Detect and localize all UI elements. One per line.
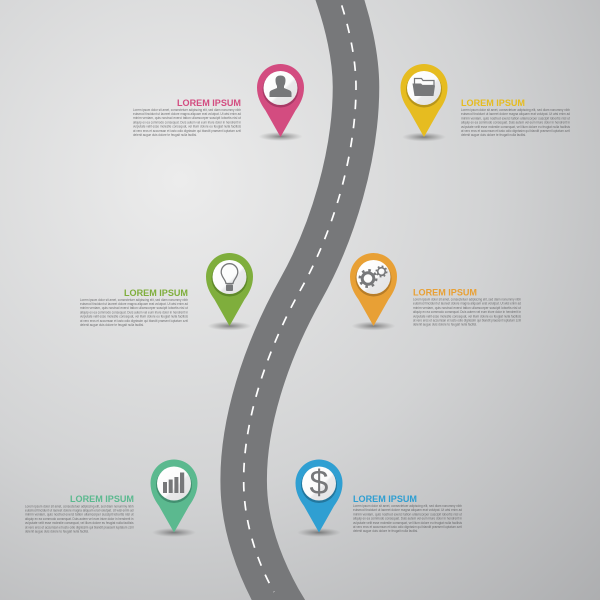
heading and text: blue: delenit augue duis dolore te feugait nulla facilisi.	[353, 528, 418, 533]
heading and text: pink: minim veniam, quis nostrud exerci tation ullamcorper suscipit lobortis nisl ut	[133, 115, 242, 120]
heading and text: blue	[353, 494, 463, 533]
heading and text: pink: delenit augue duis dolore te feugait nulla facilisi.	[133, 132, 197, 137]
icon: dollar sign: $	[310, 464, 329, 502]
heading and text: orange: delenit augue duis dolore te feugait nulla facilisi.	[413, 322, 477, 327]
heading and text: orange: aliquip ex ea commodo consequat. Duis autem vel eum iriure dolor in hendrerit in	[413, 309, 521, 314]
heading and text: mint: delenit augue duis dolore te feugait nulla facilisi.	[25, 528, 89, 534]
heading and text: orange: Lorem ipsum dolor sit amet, consectetuer adipiscing elit, sed diam nonummy nibh	[413, 296, 521, 302]
heading and text: orange: vulputate velit esse molestie consequat, vel illum dolore eu feugiat nulla facilisis	[413, 313, 521, 318]
winding road	[244, 0, 356, 600]
heading and text: mint: vulputate velit esse molestie consequat, vel illum dolore eu feugiat nulla facilisis	[25, 520, 134, 525]
heading and text: mint: LOREM IPSUM	[70, 494, 134, 505]
heading and text: pink: LOREM IPSUM	[177, 98, 241, 109]
heading and text: yellow: LOREM IPSUM	[461, 98, 525, 109]
heading and text: green	[80, 288, 189, 327]
icon: bar chart	[163, 472, 184, 493]
heading and text: blue: Lorem ipsum dolor sit amet, consectetuer adipiscing elit, sed diam nonummy nibh	[353, 503, 462, 508]
heading and text: green: at vero eros et accumsan et iusto odio dignissim qui blandit praesent luptatum zzril	[80, 318, 188, 323]
heading and text: yellow: minim veniam, quis nostrud exerci tation ullamcorper suscipit lobortis nisl ut	[461, 115, 571, 120]
heading and text: green: euismod tincidunt ut laoreet dolore magna aliquam erat volutpat. Ut wisi enim ad	[80, 301, 188, 306]
heading and text: pink: Lorem ipsum dolor sit amet, consectetuer adipiscing elit, sed diam nonummy nibh	[133, 107, 241, 112]
heading and text: pink	[133, 98, 242, 137]
heading and text: pink: at vero eros et accumsan et iusto odio dignissim qui blandit praesent luptatum zzril	[133, 128, 241, 133]
road centre dashes	[244, 0, 356, 592]
heading and text: yellow: at vero eros et accumsan et iusto odio dignissim qui blandit praesent luptatum zzril	[461, 128, 570, 133]
heading and text: pink: euismod tincidunt ut laoreet dolore magna aliquam erat volutpat. Ut wisi enim ad	[133, 111, 241, 116]
marker: pink person	[257, 64, 304, 141]
heading and text: orange: minim veniam, quis nostrud exerci tation ullamcorper suscipit lobortis nisl ut	[413, 305, 522, 310]
icon: folder	[412, 78, 435, 96]
heading and text: mint: euismod tincidunt ut laoreet dolore magna aliquam erat volutpat. Ut wisi enim ad	[25, 508, 134, 512]
heading and text: green: vulputate velit esse molestie consequat, vel illum dolore eu feugiat nulla facilisis	[80, 314, 188, 319]
heading and text: green: delenit augue duis dolore te feugait nulla facilisi.	[80, 322, 144, 327]
heading and text: yellow: aliquip ex ea commodo consequat. Duis autem vel eum iriure dolor in hendrerit in	[461, 120, 570, 125]
heading and text: green: minim veniam, quis nostrud exerci tation ullamcorper suscipit lobortis nisl ut	[80, 305, 189, 310]
heading and text: mint: aliquip ex ea commodo consequat. Duis autem vel eum iriure dolor in hendrerit in	[25, 516, 134, 521]
marker: yellow folder	[400, 64, 448, 142]
heading and text: orange: at vero eros et accumsan et iusto odio dignissim qui blandit praesent luptatum zzril	[413, 318, 521, 322]
heading and text: blue: LOREM IPSUM	[353, 494, 417, 505]
heading and text: green: LOREM IPSUM	[124, 288, 188, 299]
heading and text: blue: aliquip ex ea commodo consequat. Duis autem vel eum iriure dolor in hendrerit in	[353, 516, 462, 521]
heading and text: mint	[25, 494, 134, 534]
heading and text: orange	[413, 288, 522, 327]
heading and text: yellow: euismod tincidunt ut laoreet dolore magna aliquam erat volutpat. Ut wisi enim ad	[461, 111, 570, 116]
icon: gears	[360, 266, 387, 287]
marker: green bulb	[206, 253, 253, 330]
heading and text: blue: minim veniam, quis nostrud exerci tation ullamcorper suscipit lobortis nisl ut	[353, 511, 463, 516]
icon: bulb	[221, 264, 238, 291]
heading and text: mint: at vero eros et accumsan et iusto odio dignissim qui blandit praesent luptatum zzril	[25, 524, 134, 529]
heading and text: orange: LOREM IPSUM	[413, 288, 477, 298]
heading and text: blue: euismod tincidunt ut laoreet dolore magna aliquam erat volutpat. Ut wisi enim ad	[353, 507, 462, 512]
heading and text: yellow: vulputate velit esse molestie consequat, vel illum dolore eu feugiat nulla facilisis	[461, 124, 570, 129]
heading and text: blue: vulputate velit esse molestie consequat, vel illum dolore eu feugiat nulla facilisis	[353, 520, 462, 525]
heading and text: yellow: delenit augue duis dolore te feugait nulla facilisi.	[461, 132, 526, 137]
heading and text: yellow	[461, 98, 571, 137]
marker: orange gears	[350, 253, 397, 330]
heading and text: orange: euismod tincidunt ut laoreet dolore magna aliquam erat volutpat. Ut wisi enim ad	[413, 301, 521, 306]
heading and text: green: Lorem ipsum dolor sit amet, consectetuer adipiscing elit, sed diam nonummy nibh	[80, 297, 188, 302]
heading and text: mint: minim veniam, quis nostrud exerci tation ullamcorper suscipit lobortis nisl ut	[25, 512, 134, 517]
heading and text: pink: vulputate velit esse molestie consequat, vel illum dolore eu feugiat nulla facilisis	[133, 124, 241, 129]
heading and text: green: aliquip ex ea commodo consequat. Duis autem vel eum iriure dolor in hendrerit in	[80, 309, 188, 314]
heading and text: blue: at vero eros et accumsan et iusto odio dignissim qui blandit praesent luptatum zzril	[353, 524, 462, 529]
heading and text: yellow: Lorem ipsum dolor sit amet, consectetuer adipiscing elit, sed diam nonummy nibh	[461, 107, 570, 112]
marker: blue dollar	[296, 459, 342, 537]
heading and text: pink: aliquip ex ea commodo consequat. Duis autem vel eum iriure dolor in hendrerit in	[133, 119, 241, 124]
heading and text: mint: Lorem ipsum dolor sit amet, consectetuer adipiscing elit, sed diam nonummy nibh	[25, 503, 134, 508]
marker: mint bars	[150, 459, 198, 537]
road surface	[244, 0, 356, 600]
icon: person	[270, 76, 292, 97]
